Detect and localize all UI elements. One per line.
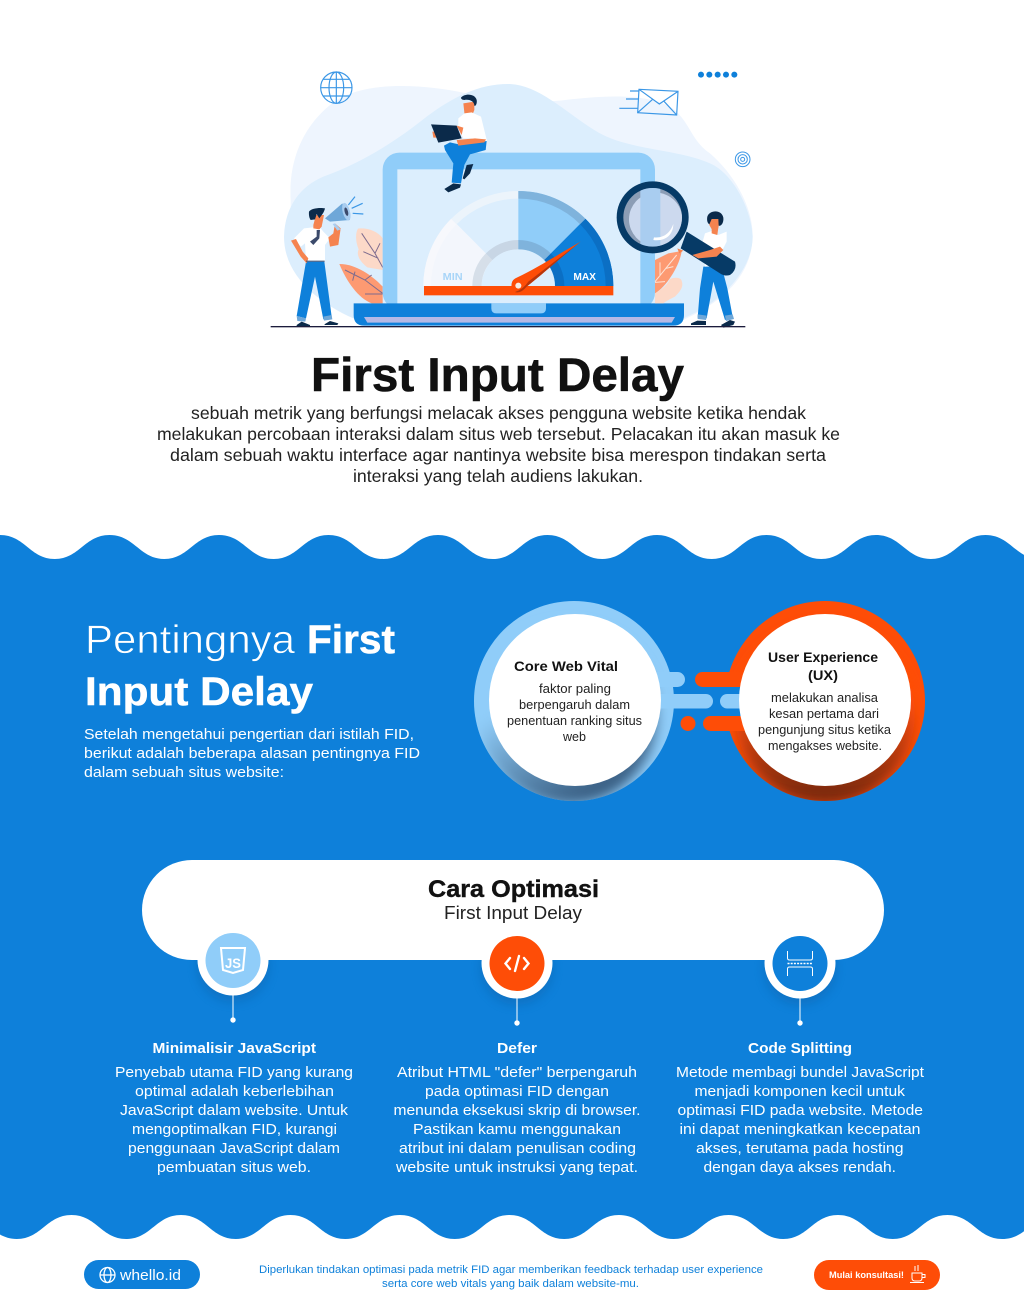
circle text: pengunjung situs ketika [758,723,891,737]
gauge [423,191,613,295]
person with magnifier [691,211,735,328]
circle text: berpengaruh dalam [519,698,630,712]
section description: Setelah mengetahui pengertian dari istilah FID, [84,726,414,743]
icon: javascript [198,924,268,1023]
logo text: whello.id [119,1267,181,1284]
section description [84,726,420,781]
column: defer [394,1040,640,1176]
circle text: web [562,730,586,744]
column heading: Minimalisir JavaScript [152,1040,316,1057]
column text: ini dapat meningkatkan kecepatan [680,1121,920,1138]
panel: cara optimasi [142,860,884,960]
circle text: kesan pertama dari [769,707,879,721]
column text: akses, terutama pada hosting [696,1140,904,1157]
icon: spiral [735,152,750,167]
button text: Mulai konsultasi! [829,1270,904,1280]
background blob light [290,86,753,320]
icon: javascript: JS [225,955,241,971]
column text: Penyebab utama FID yang kurang [115,1064,353,1081]
footer note: serta core web vitals yang baik dalam website-mu. [382,1278,639,1290]
circle heading [768,649,878,683]
intro paragraph: sebuah metrik yang berfungsi melacak akses pengguna website ketika hendak [191,403,806,423]
column text: Pastikan kamu menggunakan [413,1121,621,1138]
circle text [758,691,891,753]
column: code splitting [676,1040,925,1176]
footer note: Diperlukan tindakan optimasi pada metrik FID agar memberikan feedback terhadap user experience [259,1264,763,1276]
section description: berikut adalah beberapa alasan pentingnya FID [84,745,420,762]
icon: coffee cup [910,1265,925,1282]
column text: atribut ini dalam penulisan coding [399,1140,636,1157]
leaves right [655,251,682,303]
circle: user experience [739,614,911,786]
column text: optimasi FID pada website. Metode [678,1102,923,1119]
column text: dengan daya akses rendah. [704,1159,896,1176]
heading: pentingnya first input delay [85,618,395,714]
gauge label max: MAX [573,272,597,283]
footer button: mulai konsultasi [814,1260,940,1290]
laptop [354,153,684,326]
column heading: Code Splitting [748,1040,852,1057]
icon: www globe [100,1268,115,1282]
column text: pada optimasi FID dengan [425,1083,609,1100]
icon shadows [197,930,836,1005]
intro paragraph [157,403,840,486]
section description: dalam sebuah situs website: [84,764,284,781]
circle text: faktor paling [539,682,611,696]
intro paragraph: dalam sebuah waktu interface agar nantinya website bisa merespon tindakan serta [170,445,826,465]
intro paragraph: interaksi yang telah audiens lakukan. [353,466,643,486]
icon: code splitting [764,928,836,1026]
footer logo: whello.id [84,1260,200,1289]
column text: website untuk instruksi yang tepat. [395,1159,638,1176]
column text: menjadi komponen kecil untuk [694,1083,906,1100]
background blob blue [284,84,753,318]
icon: code [482,928,552,1026]
circle heading: Core Web Vital [514,658,618,674]
circle text: penentuan ranking situs [507,714,642,728]
column text: penggunaan JavaScript dalam [128,1140,340,1157]
circle text: melakukan analisa [771,691,878,705]
heading: pentingnya first input delay: Input Delay [85,670,314,714]
intro paragraph: melakukan percobaan interaksi dalam situs web tersebut. Pelacakan itu akan masuk ke [157,424,840,444]
needle [511,242,581,292]
heading: pentingnya first input delay: First [307,618,395,662]
title: First Input Delay [311,348,684,401]
hero illustration [271,72,753,328]
circle rings [474,601,925,804]
circle heading: (UX) [808,667,838,683]
column text [676,1064,925,1176]
column text: pembuatan situs web. [157,1159,311,1176]
ground line [271,326,745,327]
gauge label min: MIN [443,272,463,283]
panel subheading: First Input Delay [444,903,582,923]
panel heading: Cara Optimasi [428,876,599,903]
person with megaphone [291,197,363,327]
circle text [507,682,642,744]
column text: menunda eksekusi skrip di browser. [394,1102,640,1119]
column text: JavaScript dalam website. Untuk [120,1102,349,1119]
icon: envelope [619,89,678,115]
person sitting [431,95,487,192]
circle text: mengakses website. [768,739,882,753]
leaves left [339,228,383,303]
blue background panel [0,535,1024,1239]
column text: mengoptimalkan FID, kurangi [132,1121,337,1138]
footer note [259,1264,763,1290]
column text: Metode membagi bundel JavaScript [676,1064,925,1081]
column text: optimal adalah keberlebihan [135,1083,334,1100]
heading: pentingnya first input delay: Pentingnya [85,618,296,662]
column text [115,1064,353,1176]
column text: Atribut HTML "defer" berpengaruh [397,1064,637,1081]
circle heading: User Experience [768,649,878,665]
icon: dots [698,72,737,78]
icon: globe [321,72,352,103]
magnifier [617,181,736,276]
magnifier holding arm [677,247,723,258]
column: minimalisir javascript [115,1040,353,1176]
circle: core web vital [489,614,661,786]
column heading: Defer [497,1040,537,1057]
connector bars [650,672,760,731]
column text [394,1064,640,1176]
